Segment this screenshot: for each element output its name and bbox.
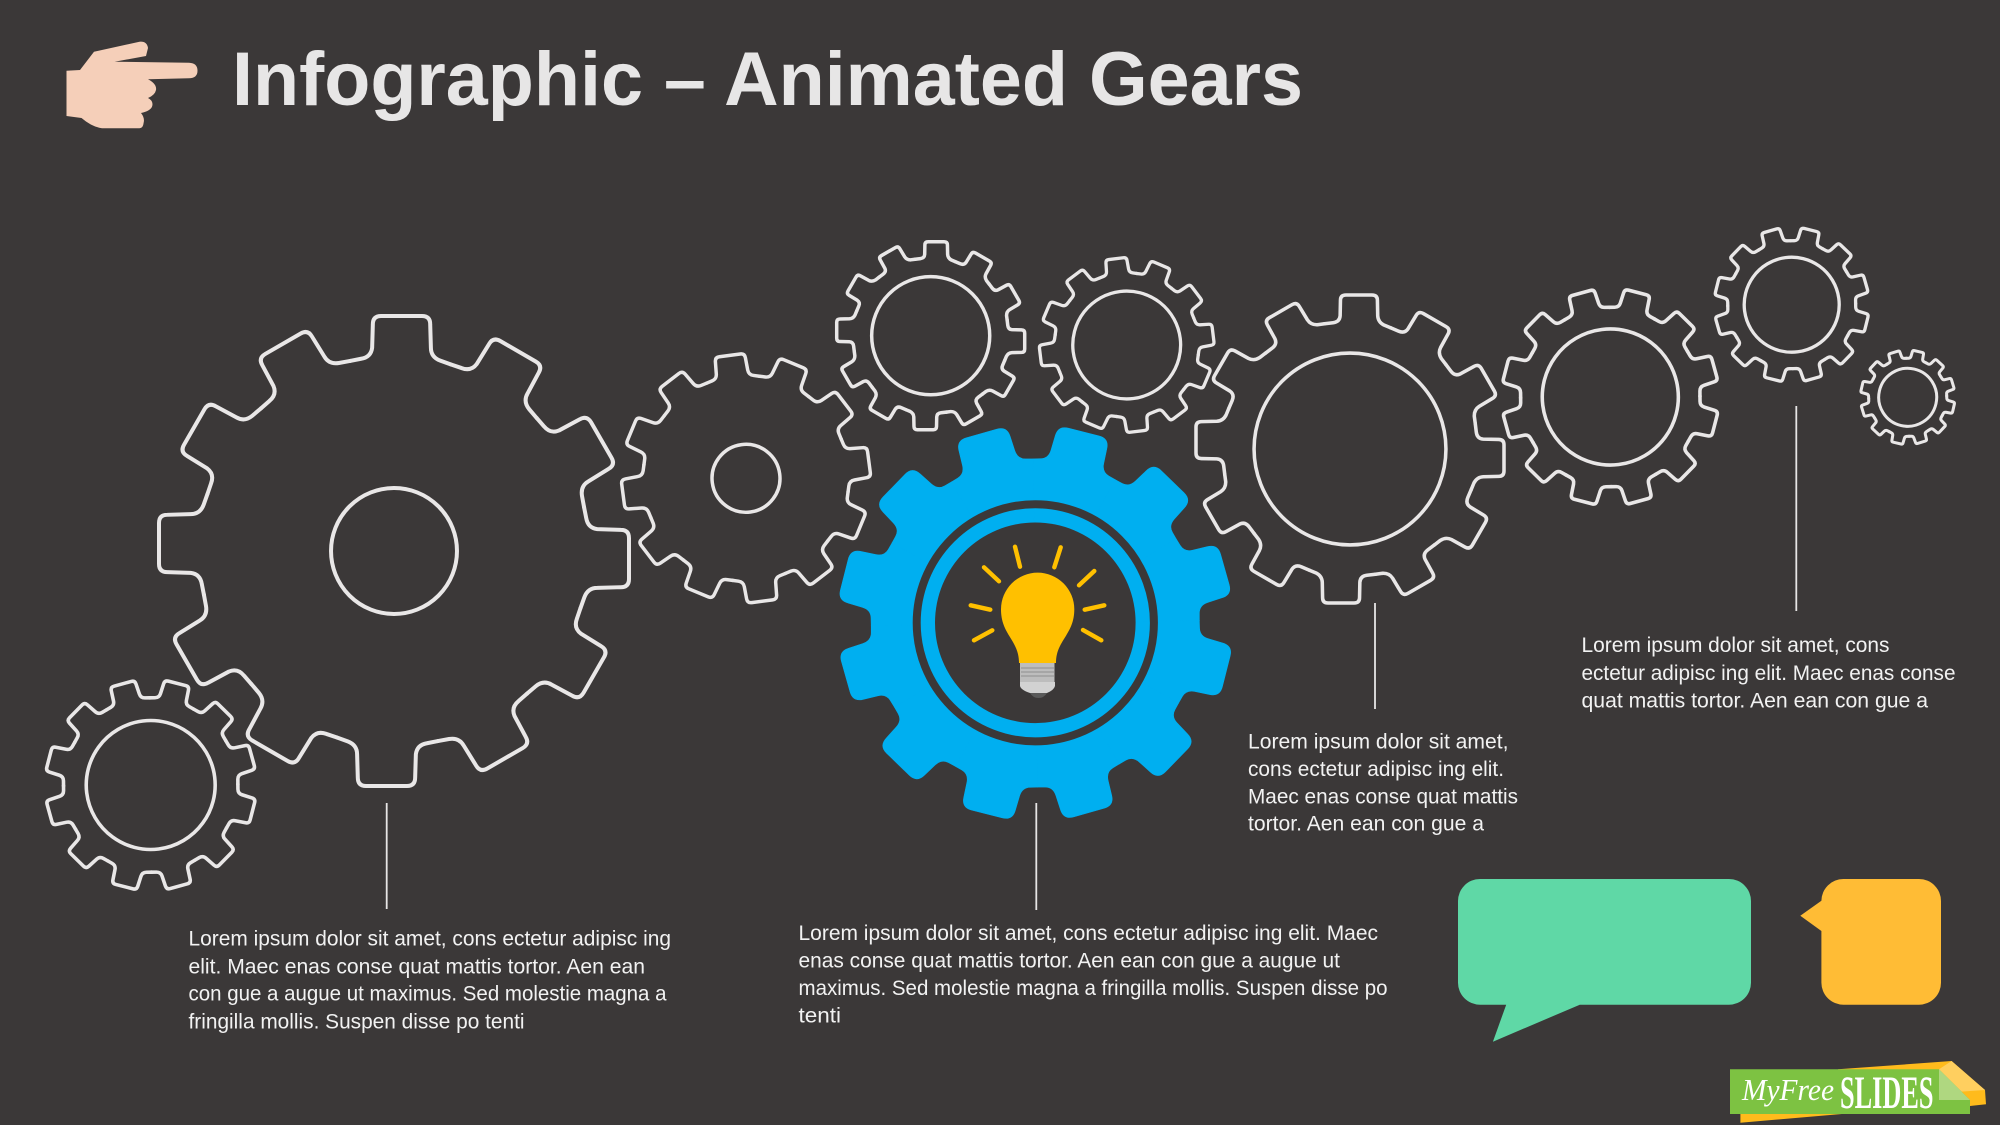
logo script word: MyFree (1741, 1072, 1834, 1107)
icon: light rays (971, 547, 1104, 640)
gear: small bottom-left outline (23, 657, 279, 913)
title: Infographic – Animated Gears (232, 37, 1303, 122)
icon: pointing hand (66, 42, 198, 128)
text block: upper right: Lorem ipsum dolor sit amet, cons (1582, 634, 1890, 657)
text block: upper right (1582, 634, 1956, 712)
blue gear body (796, 384, 1275, 862)
logo ribbon back (1740, 1061, 1986, 1123)
speech bubble: orange (1800, 879, 1941, 1005)
logo fold highlight (1939, 1061, 1985, 1092)
connector line: blue gear (1035, 803, 1037, 910)
connector line: upper right gear (1795, 406, 1797, 611)
gear: large left outline (159, 316, 629, 786)
gear: smallest far right outline (1851, 341, 1964, 454)
text block: upper right: ectetur adipisc ing elit. Maec enas conse (1582, 662, 1956, 685)
logo: MyFree Slides (1730, 1061, 1986, 1123)
text block: centre: enas conse quat mattis tortor. Aen ean con gue a augue ut (798, 950, 1340, 973)
gear: central blue with light bulb (796, 384, 1275, 862)
gear: top centre outline (1030, 248, 1224, 442)
speech bubble: green (1458, 879, 1751, 1042)
text block: left: fringilla mollis. Suspen disse po tenti (188, 1010, 524, 1033)
text block: centre (798, 922, 1388, 1028)
text block: right: Lorem ipsum dolor sit amet, (1248, 730, 1508, 753)
text block: left: con gue a augue ut maximus. Sed molestie magna a (188, 983, 667, 1006)
text block: right (1248, 730, 1518, 836)
text block: centre: tenti (798, 1005, 841, 1028)
icon: light bulb (1001, 573, 1074, 698)
gear: medium centre-left outline (607, 339, 885, 617)
gear: upper far right outline (1698, 211, 1885, 398)
connector line: right gear (1374, 603, 1376, 709)
logo green fold (1939, 1069, 1970, 1100)
gear: right outline (1479, 265, 1742, 529)
text block: left: Lorem ipsum dolor sit amet, cons ectetur adipisc ing (188, 928, 671, 951)
text block: left: elit. Maec enas conse quat mattis tortor. Aen ean (188, 955, 645, 978)
connector line: left gear (386, 803, 388, 909)
gear: large right outline (1196, 295, 1504, 603)
gear: top centre-left outline (837, 242, 1025, 430)
text block: upper right: quat mattis tortor. Aen ean con gue a (1582, 689, 1928, 712)
text block: right: tortor. Aen ean con gue a (1248, 813, 1484, 836)
text block: left (188, 928, 671, 1033)
text block: centre: maximus. Sed molestie magna a fringilla mollis. Suspen disse po (798, 977, 1388, 1000)
logo green band (1730, 1069, 1970, 1114)
text block: right: Maec enas conse quat mattis (1248, 785, 1518, 808)
text block: right: cons ectetur adipisc ing elit. (1248, 758, 1504, 781)
dark ring and hub (917, 504, 1154, 741)
text block: centre: Lorem ipsum dolor sit amet, cons ectetur adipisc ing elit. Maec (798, 922, 1378, 945)
